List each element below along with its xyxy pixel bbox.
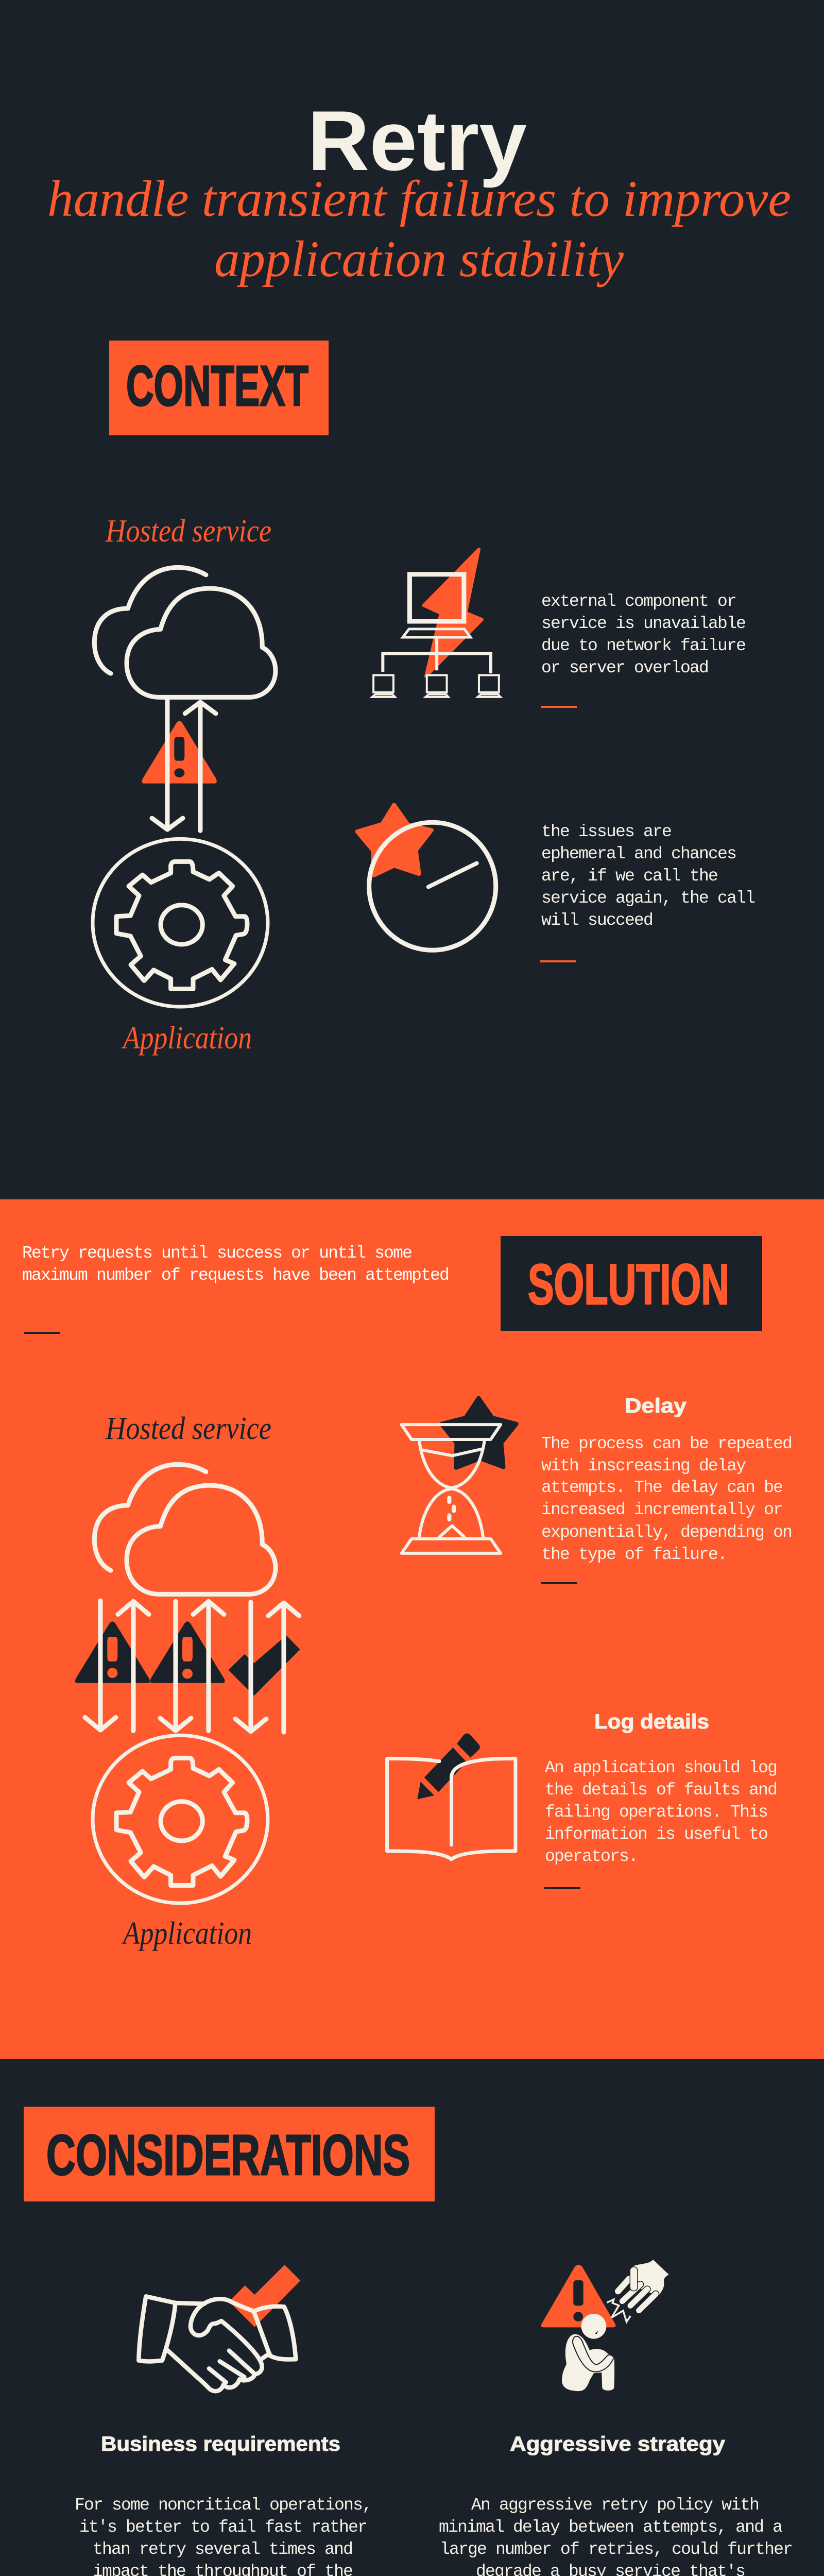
- text: delay: exponentially, depending on: [541, 1523, 792, 1542]
- text: aggressive strategy: [439, 2496, 792, 2576]
- heading: delay: Delay: [625, 1395, 687, 1417]
- text: aggressive strategy: minimal delay between attempts, and a: [439, 2518, 782, 2537]
- icon: warning with person under pressure: [541, 2260, 669, 2391]
- text: delay: [541, 1434, 792, 1564]
- heading: considerations: [24, 2107, 435, 2201]
- text: ephemeral issues: the issues are: [541, 822, 671, 841]
- subtitle: handle transient failures to improve: [47, 170, 791, 227]
- text: log details: An application should log: [545, 1758, 777, 1777]
- text: solution summary: [22, 1244, 449, 1285]
- icon: network with lightning bolt: [372, 549, 501, 697]
- text: log details: the details of faults and: [545, 1781, 777, 1800]
- text: ephemeral issues: are, if we call the: [541, 867, 717, 886]
- panel: considerations background: [0, 2059, 824, 2576]
- heading: considerations: CONSIDERATIONS: [46, 2124, 410, 2187]
- divider: delay: [541, 1582, 577, 1584]
- label: hosted service dark: Hosted service: [105, 1411, 271, 1446]
- text: log details: information is useful to: [545, 1825, 767, 1844]
- icon: warnings and check: [75, 1621, 300, 1696]
- icon: retry arrows: [85, 1601, 299, 1732]
- icon: book with pencil: [387, 1733, 516, 1859]
- heading: business requirements: Business requirements: [101, 2433, 340, 2455]
- divider: context two: [540, 960, 576, 962]
- text: business requirements: [75, 2496, 371, 2576]
- text: external component: or server overload: [541, 658, 708, 677]
- icon: application gear: [93, 839, 268, 1007]
- icon: clock with star: [357, 805, 496, 950]
- divider: solution summary: [24, 1332, 60, 1334]
- icon: hourglass with star: [402, 1398, 517, 1553]
- icon: handshake with check: [139, 2265, 300, 2391]
- text: aggressive strategy: An aggressive retry policy with: [471, 2496, 759, 2515]
- text: business requirements: For some noncritical operations,: [75, 2496, 371, 2515]
- icon: cloud: [94, 1464, 276, 1594]
- text: external component: service is unavailable: [541, 614, 745, 633]
- divider: log details: [544, 1887, 580, 1889]
- text: ephemeral issues: service again, the call: [541, 889, 754, 908]
- heading: solution: SOLUTION: [528, 1253, 729, 1316]
- text: delay: with inscreasing delay: [541, 1456, 746, 1476]
- heading: solution: [501, 1236, 762, 1331]
- heading: aggressive strategy: Aggressive strategy: [510, 2433, 726, 2455]
- text: log details: [545, 1758, 777, 1866]
- text: solution summary: Retry requests until success or until some: [22, 1244, 411, 1263]
- heading: log details: Log details: [594, 1710, 709, 1733]
- text: business requirements: than retry several times and: [93, 2540, 352, 2559]
- icon: application gear: [93, 1735, 268, 1903]
- text: aggressive strategy: large number of retries, could further: [440, 2540, 792, 2559]
- subtitle: [47, 170, 791, 287]
- icon: warning triangle: [142, 721, 217, 784]
- text: delay: the type of failure.: [541, 1545, 727, 1564]
- diagram: cloud with arrows and warning to application: [93, 567, 276, 1007]
- text: delay: increased incrementally or: [541, 1500, 782, 1519]
- subtitle: application stability: [214, 230, 624, 287]
- heading: context: CONTEXT: [126, 354, 308, 418]
- text: solution summary: maximum number of requests have been attempted: [22, 1266, 449, 1285]
- text: delay: attempts. The delay can be: [541, 1478, 782, 1497]
- text: business requirements: it's better to fail fast rather: [79, 2518, 367, 2537]
- text: log details: failing operations. This: [545, 1803, 767, 1822]
- icon: cloud: [94, 567, 276, 697]
- text: external component: external component or: [541, 592, 736, 611]
- title: Retry: [307, 93, 527, 188]
- label: hosted service: Hosted service: [105, 514, 271, 549]
- divider: context one: [541, 706, 577, 708]
- text: log details: operators.: [545, 1847, 638, 1866]
- text: external component: due to network failure: [541, 636, 745, 655]
- label: application dark: Application: [122, 1916, 252, 1951]
- text: external component: [541, 592, 745, 677]
- heading: context: [109, 341, 329, 435]
- text: ephemeral issues: ephemeral and chances: [541, 844, 736, 863]
- text: ephemeral issues: will succeed: [541, 911, 653, 930]
- text: delay: The process can be repeated: [541, 1434, 792, 1453]
- diagram: retried calls between cloud and application: [75, 1464, 300, 1903]
- panel: context background: [0, 0, 824, 1199]
- text: ephemeral issues: [541, 822, 754, 930]
- panel: solution background: [0, 1199, 824, 2059]
- icon: request arrows: [152, 699, 216, 831]
- label: application: Application: [122, 1021, 252, 1056]
